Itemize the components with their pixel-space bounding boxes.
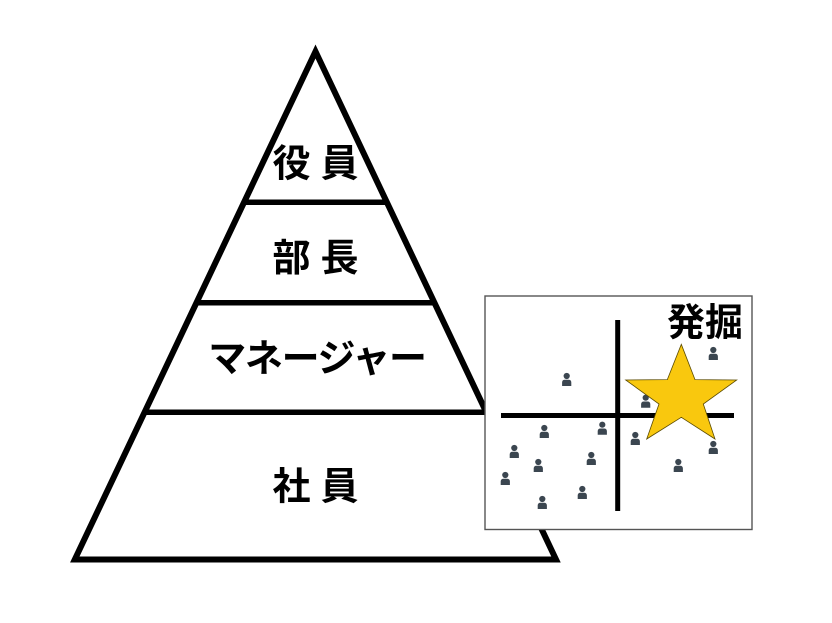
panel: talent discovery matrix <box>485 296 752 530</box>
pyramid outline <box>75 52 556 560</box>
label: employees: 社員 <box>272 466 369 508</box>
label: department heads: 部長 <box>272 238 369 280</box>
matrix axes <box>501 320 734 511</box>
label: managers: マネージャー <box>208 338 426 380</box>
tier divider lines <box>144 202 488 412</box>
pyramid <box>75 52 556 560</box>
panel heading: 発掘 <box>667 302 743 344</box>
star <box>626 344 737 439</box>
label: executives: 役員 <box>272 144 369 186</box>
panel frame <box>485 296 752 530</box>
people icons <box>501 347 718 509</box>
